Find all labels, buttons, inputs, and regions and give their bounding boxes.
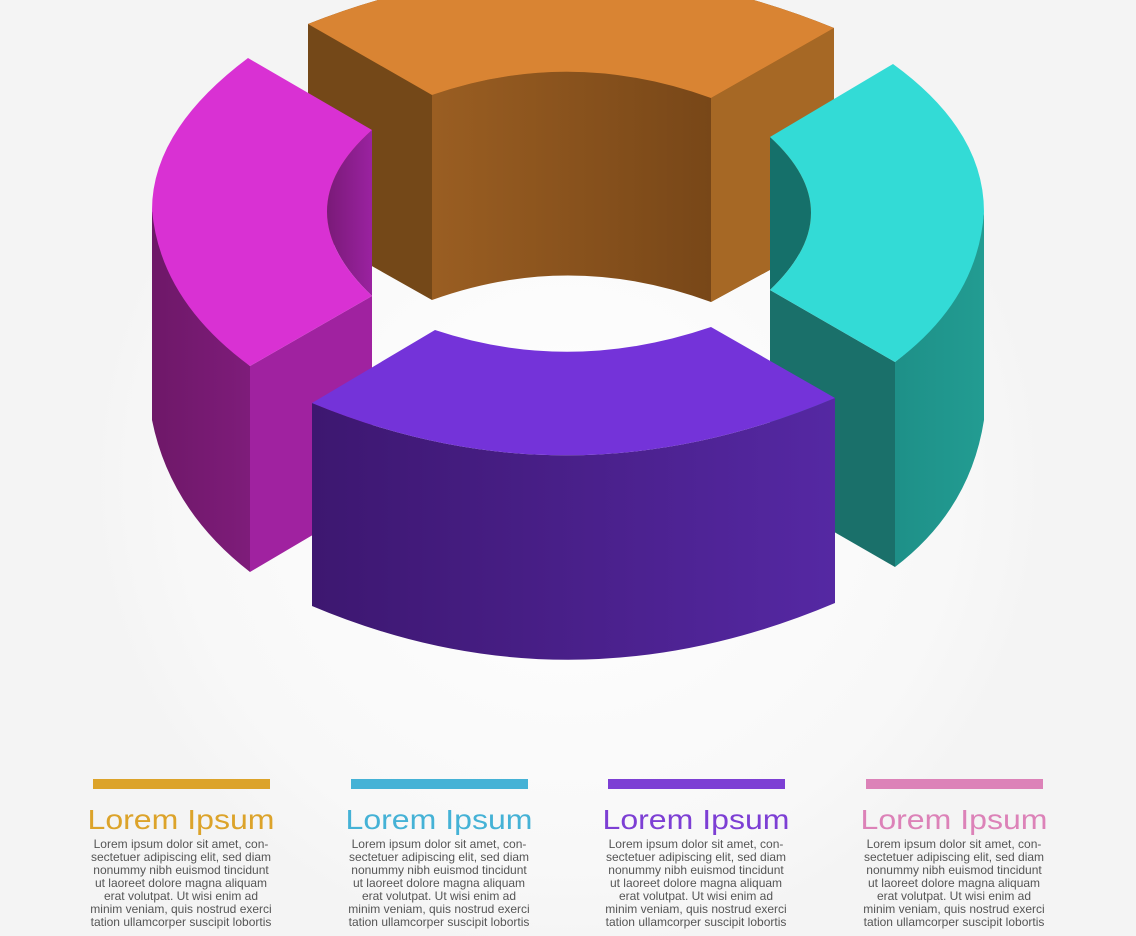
- column 3: minim veniam, quis nostrud exerci: [605, 902, 787, 916]
- column 4: erat volutpat. Ut wisi enim ad: [877, 889, 1031, 903]
- column 3: Lorem Ipsum: [602, 804, 790, 835]
- column 1: sectetuer adipiscing elit, sed diam: [91, 850, 271, 864]
- column 1: erat volutpat. Ut wisi enim ad: [104, 889, 258, 903]
- column 4: nonummy nibh euismod tincidunt: [866, 863, 1042, 877]
- column 1: Lorem Ipsum: [88, 804, 274, 835]
- column 4: Lorem Ipsum: [860, 804, 1048, 835]
- column 2: sectetuer adipiscing elit, sed diam: [349, 850, 529, 864]
- column 4: ut laoreet dolore magna aliquam: [868, 876, 1040, 890]
- segment: purple: [312, 327, 835, 660]
- column 2: ut laoreet dolore magna aliquam: [353, 876, 525, 890]
- column 1: ut laoreet dolore magna aliquam: [95, 876, 267, 890]
- column 2: erat volutpat. Ut wisi enim ad: [362, 889, 516, 903]
- column 4: sectetuer adipiscing elit, sed diam: [864, 850, 1044, 864]
- column 1: [88, 779, 274, 929]
- column 2: Lorem ipsum dolor sit amet, con-: [352, 837, 526, 851]
- segment: magenta: [152, 58, 372, 572]
- column 3: tation ullamcorper suscipit lobortis: [606, 915, 786, 929]
- column 1: nonummy nibh euismod tincidunt: [93, 863, 269, 877]
- segment: cyan: [770, 64, 984, 567]
- column 3: sectetuer adipiscing elit, sed diam: [606, 850, 786, 864]
- column 2: [346, 779, 532, 929]
- column 2: tation ullamcorper suscipit lobortis: [349, 915, 529, 929]
- column 2: Lorem Ipsum: [346, 804, 532, 835]
- column 3: ut laoreet dolore magna aliquam: [610, 876, 782, 890]
- column 3: [602, 779, 790, 929]
- column 4: [860, 779, 1048, 929]
- column 3: nonummy nibh euismod tincidunt: [608, 863, 784, 877]
- column 1: Lorem ipsum dolor sit amet, con-: [94, 837, 268, 851]
- column 4: Lorem ipsum dolor sit amet, con-: [867, 837, 1041, 851]
- column 3: erat volutpat. Ut wisi enim ad: [619, 889, 773, 903]
- column 3: Lorem ipsum dolor sit amet, con-: [609, 837, 783, 851]
- column 2: nonummy nibh euismod tincidunt: [351, 863, 527, 877]
- segment: orange: [308, 0, 834, 302]
- column 2: minim veniam, quis nostrud exerci: [348, 902, 530, 916]
- column 4: minim veniam, quis nostrud exerci: [863, 902, 1045, 916]
- column 4: tation ullamcorper suscipit lobortis: [864, 915, 1044, 929]
- column 1: tation ullamcorper suscipit lobortis: [91, 915, 271, 929]
- column 1: minim veniam, quis nostrud exerci: [90, 902, 272, 916]
